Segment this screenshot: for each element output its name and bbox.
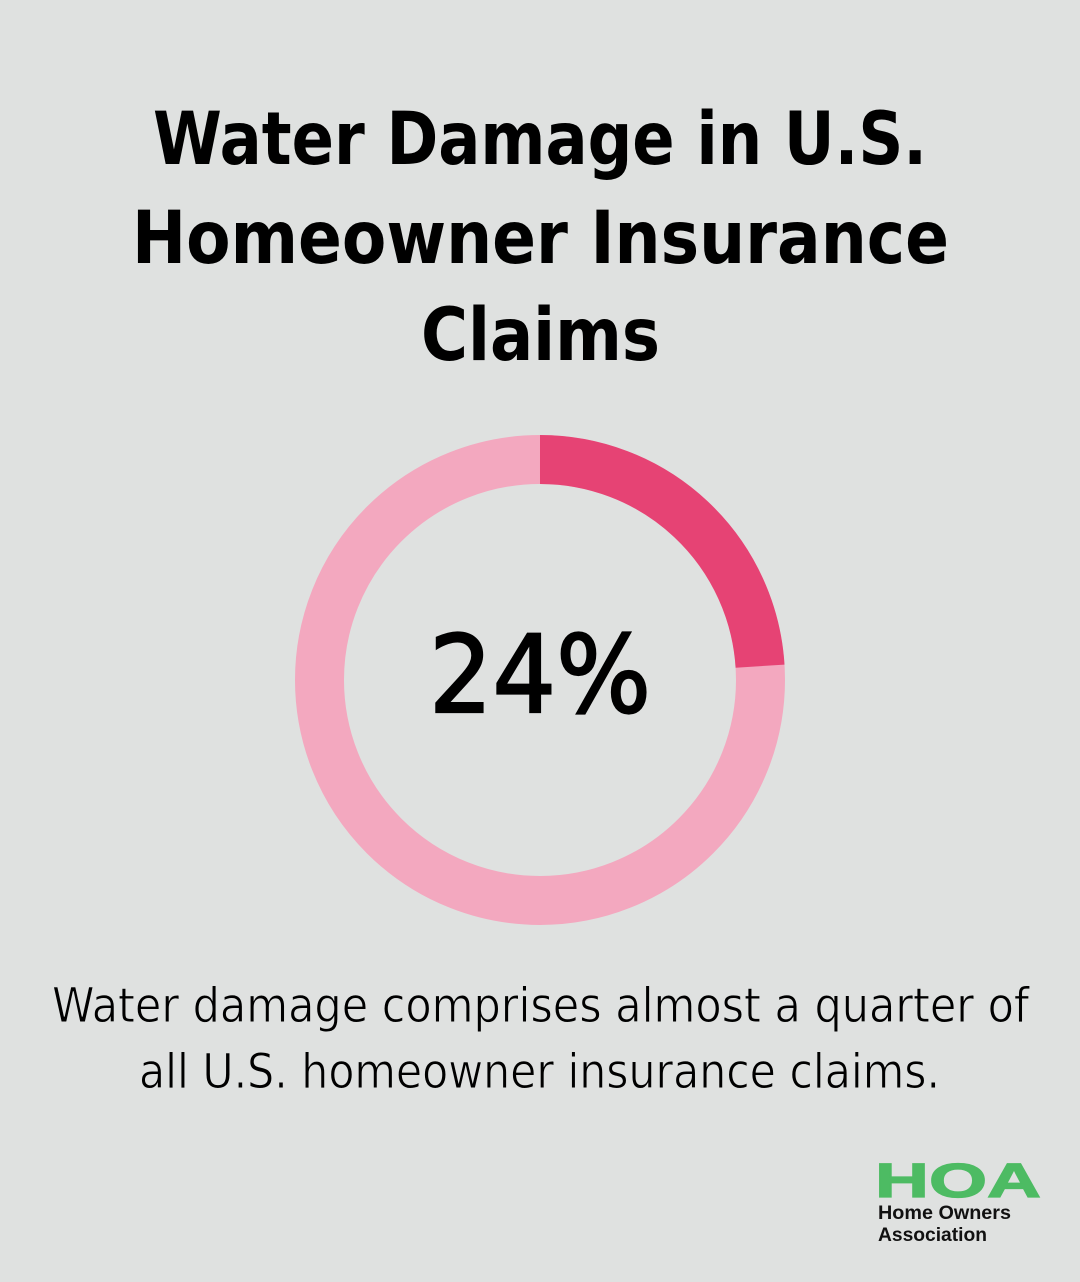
title: Water Damage in U.S. bbox=[153, 97, 927, 182]
title: Claims bbox=[421, 293, 660, 378]
description text bbox=[52, 978, 1030, 1100]
donut chart: 24% bbox=[320, 460, 760, 900]
title bbox=[132, 97, 949, 378]
logo: HOA Home Owners Association bbox=[875, 1155, 1041, 1246]
title: Homeowner Insurance bbox=[132, 196, 949, 281]
logo: HOA Home Owners Association: Home Owners bbox=[878, 1203, 1011, 1224]
description text: all U.S. homeowner insurance claims. bbox=[139, 1044, 940, 1100]
donut value: 24% bbox=[429, 614, 651, 738]
logo: HOA Home Owners Association: HOA bbox=[875, 1155, 1041, 1208]
logo: HOA Home Owners Association: Association bbox=[878, 1225, 987, 1246]
